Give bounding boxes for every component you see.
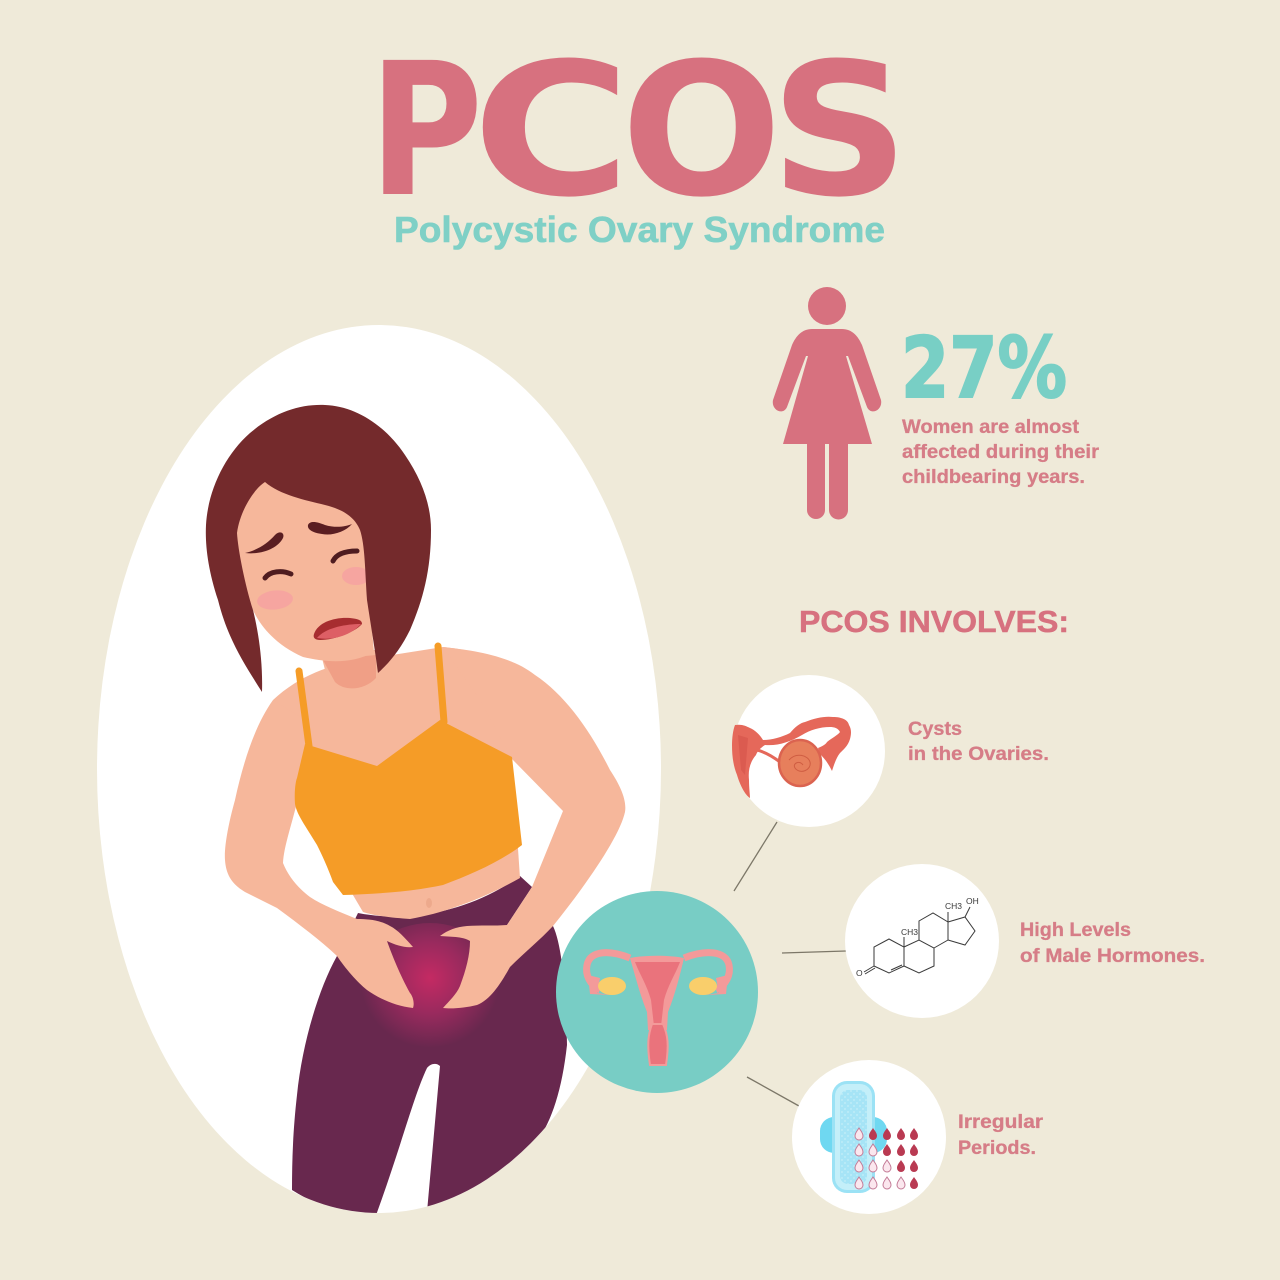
hair [206, 405, 431, 692]
neck [322, 650, 376, 669]
statistic description: Women are almost [902, 417, 1080, 438]
face [228, 470, 374, 661]
navel [426, 898, 432, 908]
title: O [621, 24, 782, 238]
pelvic pain glow [367, 923, 492, 1042]
torso skin [273, 647, 520, 919]
cheek blush [256, 567, 370, 611]
statistic description: affected during their [902, 442, 1100, 463]
neck shadow [323, 655, 376, 688]
subtitle: Polycystic Ovary Syndrome [394, 209, 885, 250]
circle: high levels of male hormones [845, 864, 999, 1018]
woman figure [225, 646, 625, 1218]
right arm and hand [440, 647, 625, 1008]
teal circle with uterus icon [556, 891, 758, 1093]
label: male hormones [1020, 920, 1205, 967]
icon: sanitary pad [820, 1081, 887, 1193]
trousers [292, 876, 567, 1218]
label: male hormones: of Male Hormones. [1020, 946, 1205, 967]
circle: cysts in the ovaries [732, 675, 885, 827]
icon: testosterone molecule: CH3 [945, 901, 962, 911]
heading: PCOS involves: PCOS INVOLVES: [799, 604, 1069, 639]
icon: testosterone molecule: OH [966, 896, 979, 906]
icon: female figure [773, 287, 881, 520]
title [369, 24, 909, 238]
circle: irregular periods [792, 1060, 946, 1214]
icon: uterus [587, 953, 729, 1065]
left arm and hand [225, 700, 414, 1008]
label: cysts: Cysts [908, 719, 962, 740]
icon: grid of blood drops [855, 1128, 918, 1189]
icon: testosterone molecule [856, 896, 979, 978]
straps [299, 646, 444, 746]
statistic description [902, 417, 1100, 488]
white oval panel with illustrated woman [97, 325, 661, 1218]
label: cysts [908, 719, 1049, 765]
connector lines [734, 822, 846, 1106]
orange top [295, 720, 522, 895]
icon: testosterone molecule: O [856, 968, 863, 978]
label: irregular periods: Irregular [958, 1112, 1044, 1133]
statistic description: childbearing years. [902, 467, 1085, 488]
title: P [369, 24, 483, 238]
label: irregular periods: Periods. [958, 1138, 1036, 1159]
face details [245, 522, 362, 640]
label: cysts: in the Ovaries. [908, 744, 1049, 765]
icon: testosterone molecule: CH3 [901, 927, 918, 937]
label: male hormones: High Levels [1020, 920, 1131, 941]
icon: ovary and fallopian tube [732, 717, 851, 798]
title: S [770, 24, 909, 238]
statistic: 27%: 27% [901, 319, 1067, 417]
title: C [472, 24, 631, 238]
label: irregular periods [958, 1112, 1044, 1159]
